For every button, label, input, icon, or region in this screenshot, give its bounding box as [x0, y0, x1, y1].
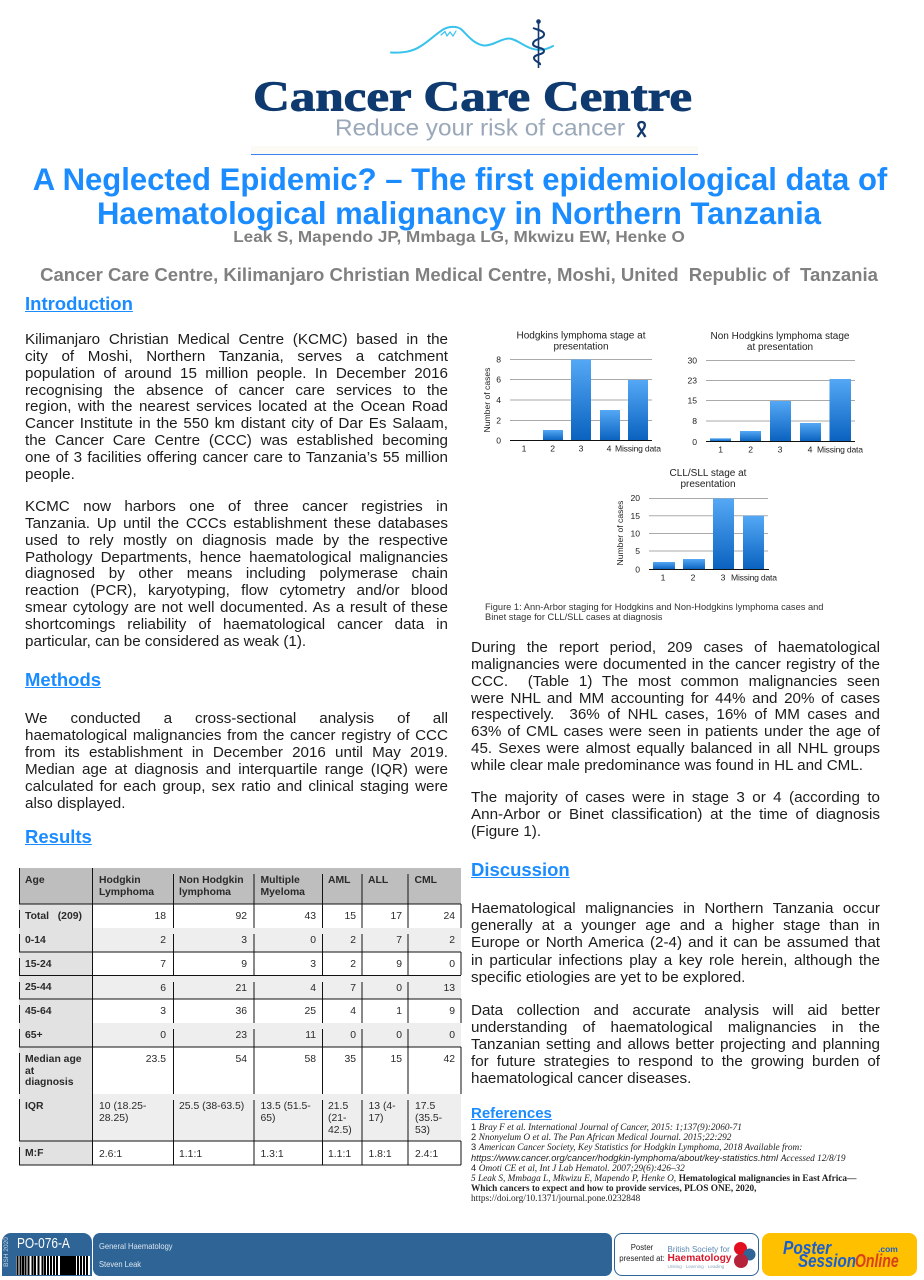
text block: methods: also displayed.	[25, 795, 125, 812]
chart: Non Hodgkins lymphoma stage: 8	[692, 416, 697, 426]
table row labels: IQR	[25, 1101, 44, 1112]
chart: CLL/SLL stage: presentation	[680, 479, 736, 490]
text block: introduction paragraph 1: the Cancer Care Centre (CCC) was established becoming	[25, 432, 448, 449]
text block: discussion paragraph 1: Europe or North America (2-4) and it can be assumed that	[471, 934, 880, 951]
table IQR and sex ratio values: 1.1:1	[179, 1149, 202, 1160]
footer: session bar	[93, 1233, 612, 1276]
chart: Hodgkins lymphoma stage: 0	[496, 436, 501, 446]
chart: Hodgkins lymphoma stage: 1	[522, 444, 527, 454]
icon: mountain wave	[391, 27, 553, 53]
table IQR and sex ratio values: 17.5	[415, 1101, 435, 1112]
text block: introduction paragraph 1: population of around 15 million people. In December 2016	[25, 365, 448, 382]
table header row: AML	[328, 875, 351, 886]
chart: Hodgkins lymphoma stage: 6	[496, 374, 501, 384]
chart: Non Hodgkins lymphoma stage: 4	[808, 444, 813, 454]
poster presented at: Poster	[631, 1243, 653, 1252]
table IQR and sex ratio values: 2.6:1	[99, 1149, 122, 1160]
chart: CLL/SLL stage	[615, 468, 777, 582]
table IQR and sex ratio values	[99, 1101, 442, 1160]
title: A Neglected Epidemic? – The first epidemiological data of	[33, 162, 887, 197]
table row labels: M:F	[25, 1148, 43, 1159]
text block: results paragraph 1: CCC. (Table 1) The most common malignancies seen	[471, 673, 880, 690]
chart: Hodgkins lymphoma stage	[482, 330, 661, 454]
figure caption: Figure 1: Ann-Arbor staging for Hodgkins and Non-Hodgkins lymphoma cases and	[485, 602, 823, 612]
table numeric values: 3	[310, 959, 316, 970]
title	[33, 162, 888, 230]
presenter: Steven Leak	[99, 1259, 141, 1269]
table IQR and sex ratio values: 13.5 (51.5-	[260, 1101, 311, 1112]
Haematology wordmark: Haematology	[668, 1252, 731, 1264]
text block: results paragraph 1: malignancies were documented in the cancer registry of the	[471, 656, 880, 673]
references list: 2 Nnonyelum O et al. The Pan African Medical Journal. 2015;22:292	[471, 1132, 731, 1143]
references list: https://www.cancer.org/cancer/hodgkin-lymphoma/about/key-statistics.html Accessed 12/8/19	[471, 1153, 846, 1164]
table IQR and sex ratio values: (21-	[328, 1113, 346, 1124]
icon: society circles	[734, 1242, 756, 1268]
table numeric values: 7	[396, 935, 402, 946]
text block: introduction paragraph 2: Tanzania. Up until the CCCs establishment these databases	[25, 515, 448, 532]
text block: results paragraph 2: Ann-Arbor or Binet classification) at the time of diagnosis	[471, 806, 880, 823]
chart: Hodgkins lymphoma stage: 2	[496, 416, 501, 426]
text block: discussion paragraph 2: haematological cancer diseases.	[471, 1070, 691, 1087]
figure caption	[485, 602, 823, 622]
text block: discussion paragraph 1: generally at a younger age and a higher stage than in	[471, 917, 880, 934]
table IQR and sex ratio values: 2.4:1	[415, 1149, 438, 1160]
table row labels: 25-44	[25, 982, 52, 993]
heading: References: References	[471, 1105, 552, 1122]
text block: methods: Median age at diagnosis and interquartile range (IQR) were	[25, 761, 448, 778]
table IQR and sex ratio values: 10 (18.25-	[99, 1101, 146, 1112]
text block: introduction paragraph 1: recognising the absence of cancer care services to the	[25, 382, 448, 399]
table numeric values: 0	[396, 1030, 402, 1041]
table row labels: 15-24	[25, 959, 52, 970]
chart: Hodgkins lymphoma stage: 3	[579, 444, 584, 454]
chart: Non Hodgkins lymphoma stage: 1	[718, 444, 723, 454]
table numeric values: 24	[443, 911, 455, 922]
title: Haematological malignancy in Northern Tanzania	[97, 196, 821, 230]
chart: Hodgkins lymphoma stage: Hodgkins lymphoma stage at	[517, 330, 646, 342]
text block: discussion paragraph 2: for future strategies to respond to the growing burden of	[471, 1053, 880, 1070]
text block: results paragraph 2: The majority of cases were in stage 3 or 4 (according to	[471, 789, 880, 806]
affiliation: Cancer Care Centre, Kilimanjaro Christian Medical Centre, Moshi, United Republic of Tanzania	[40, 264, 878, 285]
table row labels	[25, 911, 82, 1159]
table numeric values: 2	[160, 935, 166, 946]
table IQR and sex ratio values: 42.5)	[328, 1125, 352, 1136]
table header row: CML	[414, 875, 438, 886]
table numeric values: 3	[241, 935, 247, 946]
references list	[471, 1122, 856, 1204]
table numeric values: 9	[241, 959, 247, 970]
figure caption: Binet stage for CLL/SLL cases at diagnosis	[485, 612, 662, 622]
table numeric values: 43	[304, 911, 316, 922]
text block: introduction paragraph 1: people.	[25, 466, 75, 483]
table numeric values: 2	[449, 935, 455, 946]
text block: methods	[25, 710, 448, 812]
wordmark: Online: Online	[855, 1251, 899, 1271]
text block: introduction paragraph 1	[25, 331, 448, 483]
heading: Results: Results	[25, 826, 92, 847]
text block: discussion paragraph 2	[471, 1002, 880, 1087]
chart: CLL/SLL stage: 1	[661, 572, 666, 582]
text block: introduction paragraph 2: particular, can be considered as weak (1).	[25, 633, 306, 650]
poster presented at	[619, 1243, 665, 1262]
table numeric values: 42	[443, 1054, 455, 1065]
table row labels: diagnosis	[25, 1077, 74, 1088]
chart: CLL/SLL stage: Number of cases	[615, 501, 625, 565]
table numeric values: 0	[449, 959, 455, 970]
table IQR and sex ratio values: 25.5 (38-63.5)	[179, 1101, 244, 1112]
table numeric values: 7	[350, 983, 356, 994]
chart: Hodgkins lymphoma stage: 8	[496, 354, 501, 364]
table row labels: 0-14	[25, 935, 46, 946]
text block: methods: calculated for each group, sex ratio and clinical staging were	[25, 778, 448, 795]
society year: BSH 2020	[3, 1237, 10, 1267]
table numeric values: 0	[160, 1030, 166, 1041]
table header row: ALL	[368, 875, 389, 886]
table numeric values: 17	[390, 911, 402, 922]
chart: CLL/SLL stage: CLL/SLL stage at	[670, 468, 747, 479]
table numeric values: 2	[350, 935, 356, 946]
text block: discussion paragraph 1: Haematological malignancies in Northern Tanzania occur	[471, 900, 880, 917]
text block: introduction paragraph 1: Kilimanjaro Christian Medical Centre (KCMC) based in the	[25, 331, 448, 348]
references list: https://doi.org/10.1371/journal.pone.0232848	[471, 1194, 640, 1204]
chart: Hodgkins lymphoma stage: Missing data	[615, 444, 661, 454]
icon: ribbon	[638, 122, 646, 137]
table numeric values: 4	[350, 1006, 356, 1017]
table header row	[25, 875, 438, 898]
table numeric values: 0	[396, 983, 402, 994]
table header row: Multiple	[260, 875, 300, 886]
wordmark: Poster: Poster	[783, 1238, 831, 1258]
table numeric values: 15	[344, 911, 356, 922]
table header row: Myeloma	[260, 887, 305, 898]
table numeric values: 11	[305, 1030, 316, 1041]
table IQR and sex ratio values: 17)	[368, 1113, 384, 1124]
table IQR and sex ratio values: 28.25)	[99, 1113, 128, 1124]
text block: methods: We conducted a cross-sectional analysis of all	[25, 710, 448, 727]
footer: British Society for Haematology badge	[614, 1233, 759, 1276]
chart: CLL/SLL stage: 3	[721, 572, 726, 582]
text block: results paragraph 1: 45. Sexes were almost equally balanced in all NHL groups	[471, 740, 880, 757]
wordmark: .com: .com	[878, 1244, 898, 1254]
authors: Leak S, Mapendo JP, Mmbaga LG, Mkwizu EW, Henke O	[233, 229, 685, 246]
wordmark: Session: Session	[798, 1251, 856, 1271]
text block: results paragraph 1: 63% of CML cases were seen in patients under the age of	[471, 723, 880, 740]
text block: introduction paragraph 2: reaction (PCR), karyotyping, flow cytometry and/or blood	[25, 582, 448, 599]
text block: discussion paragraph 2: Tanzanian setting and allows better projecting and planning	[471, 1036, 880, 1053]
table numeric values: 1	[396, 1006, 402, 1017]
table numeric values: 58	[304, 1054, 316, 1065]
society name: British Society for	[668, 1245, 730, 1254]
text block: results paragraph 1: respectively. 36% of NHL cases, 16% of MM cases and	[471, 706, 880, 723]
chart: Hodgkins lymphoma stage: 2	[550, 444, 555, 454]
text block: results paragraph 1: were NHL and MM accounting for 44% and 20% of cases	[471, 690, 880, 707]
references list: 4 Omoti CE et al, Int J Lab Hematol. 2007;29(6):426–32	[471, 1163, 685, 1174]
table IQR and sex ratio values: 1.3:1	[260, 1149, 284, 1160]
table numeric values: 4	[310, 983, 316, 994]
chart: Non Hodgkins lymphoma stage: 15	[687, 396, 697, 406]
chart: CLL/SLL stage: 10	[630, 528, 640, 538]
text block: methods: haematological malignancies from the cancer registry of CCC	[25, 727, 448, 744]
table numeric values: 3	[160, 1006, 166, 1017]
table row labels: at	[25, 1066, 35, 1077]
text block: discussion paragraph 1	[471, 900, 880, 986]
table row labels: 65+	[25, 1030, 43, 1041]
chart: Non Hodgkins lymphoma stage: Missing data	[817, 444, 863, 454]
table numeric values: 25	[304, 1006, 316, 1017]
table numeric values: 2	[350, 959, 356, 970]
references list: 1 Bray F et al. International Journal of Cancer, 2015: 1;137(9):2060-71	[471, 1122, 742, 1133]
text block: introduction paragraph 2: KCMC now harbors one of three cancer registries in	[25, 498, 448, 515]
icon: rod of asclepius	[533, 19, 544, 68]
chart: Non Hodgkins lymphoma stage	[687, 331, 863, 454]
chart: Non Hodgkins lymphoma stage: Non Hodgkins lymphoma stage	[711, 331, 850, 342]
chart: Hodgkins lymphoma stage: 4	[496, 395, 501, 405]
barcode	[16, 1256, 90, 1275]
logo wordmark: Cancer Care Centre	[253, 74, 692, 120]
table IQR and sex ratio values: 65)	[260, 1113, 276, 1124]
chart: CLL/SLL stage: 5	[635, 546, 640, 556]
table numeric values: 9	[449, 1006, 455, 1017]
table numeric values	[146, 911, 455, 1065]
chart: Hodgkins lymphoma stage: 4	[607, 444, 612, 454]
table numeric values: 9	[396, 959, 402, 970]
chart: Non Hodgkins lymphoma stage: 0	[692, 437, 697, 447]
table row labels: 45-64	[25, 1006, 52, 1017]
text block: introduction paragraph 1: Cancer Institute in the 550 km distant city of Dar Es Salaam,	[25, 415, 448, 432]
chart: CLL/SLL stage: Missing data	[731, 572, 777, 582]
references list: Which cancers to expect and how to provide services, PLOS ONE, 2020,	[471, 1184, 756, 1194]
heading: Methods: Methods	[25, 669, 101, 690]
table numeric values: 15	[390, 1054, 402, 1065]
chart: Hodgkins lymphoma stage: Number of cases	[482, 368, 492, 432]
table numeric values: 21	[235, 983, 247, 994]
text block: methods: from its establishment in December 2016 until May 2019.	[25, 744, 448, 761]
text block: discussion paragraph 2: Data collection and accurate analysis will aid better	[471, 1002, 880, 1019]
logo tagline: Reduce your risk of cancer	[335, 114, 625, 140]
table header row: Hodgkin	[99, 875, 141, 886]
table numeric values: 35	[344, 1054, 356, 1065]
text block: introduction paragraph 2: smear cytology are not well documented. As a result of these	[25, 599, 448, 616]
table IQR and sex ratio values: 53)	[415, 1125, 430, 1136]
references list: 5 Leak S, Mmbaga L, Mkwizu E, Mapendo P, Henke O, Hematological malignancies in East Africa—	[471, 1174, 856, 1184]
table row labels: Median age	[25, 1054, 82, 1065]
society strapline: Uniting · Learning · Leading	[668, 1264, 724, 1269]
chart: Non Hodgkins lymphoma stage: at presentation	[747, 342, 813, 353]
table IQR and sex ratio values: 1.1:1	[328, 1149, 351, 1160]
text block: introduction paragraph 1: one of 3 facilities offering cancer care to Tanzania’s 55 million	[25, 449, 448, 466]
logo: Cancer Care Centre	[251, 19, 698, 155]
table IQR and sex ratio values: (35.5-	[415, 1113, 442, 1124]
text block: results paragraph 1: During the report period, 209 cases of haematological	[471, 639, 880, 656]
footer: poster id tab	[2, 1233, 92, 1276]
table numeric values: 54	[235, 1054, 247, 1065]
session topic: General Haematology	[99, 1241, 173, 1251]
table header row: Lymphoma	[99, 887, 154, 898]
table IQR and sex ratio values: 1.8:1	[368, 1149, 392, 1160]
chart: CLL/SLL stage: 20	[630, 493, 640, 503]
table numeric values: 36	[235, 1006, 247, 1017]
table row labels: Total (209)	[25, 911, 82, 922]
table numeric values: 92	[235, 911, 247, 922]
text block: results paragraph 1	[471, 639, 880, 774]
heading: Introduction: Introduction	[25, 293, 133, 314]
text block: introduction paragraph 2: Pathology Departments, hence haematological malignancies	[25, 549, 448, 566]
chart: Non Hodgkins lymphoma stage: 30	[687, 356, 697, 366]
table header row: lymphoma	[179, 887, 231, 898]
table IQR and sex ratio values: 21.5	[328, 1101, 348, 1112]
text block: introduction paragraph 2: diagnosed by other means including polymerase chain	[25, 565, 448, 582]
text block: results paragraph 2: (Figure 1).	[471, 823, 541, 840]
table numeric values: 23.5	[146, 1054, 166, 1065]
text block: results paragraph 1: while clear male predominance was found in HL and CML.	[471, 757, 863, 774]
table numeric values: 18	[154, 911, 166, 922]
text block: introduction paragraph 1: region, with the nearest services located at the Ocean Road	[25, 398, 448, 415]
references list: 3 American Cancer Society, Key Statistics for Hodgkin Lymphoma, 2018 Available from:	[471, 1142, 802, 1153]
text block: discussion paragraph 1: in particular infections play a key role herein, although the	[471, 952, 880, 969]
table numeric values: 0	[449, 1030, 455, 1041]
chart: CLL/SLL stage: 2	[691, 572, 696, 582]
chart: Non Hodgkins lymphoma stage: 23	[687, 376, 697, 386]
table numeric values: 0	[310, 935, 316, 946]
text block: introduction paragraph 1: city of Moshi, Northern Tanzania, serves a catchment	[25, 348, 448, 365]
table numeric values: 7	[160, 959, 166, 970]
footer: Poster Session Online badge	[762, 1233, 917, 1276]
text block: introduction paragraph 2: used to rely mostly on diagnosis made by the respective	[25, 532, 448, 549]
poster number: PO-076-A	[17, 1236, 70, 1252]
table header row: Age	[25, 875, 45, 886]
poster presented at: presented at:	[619, 1254, 665, 1262]
table IQR and sex ratio values: 13 (4-	[368, 1101, 396, 1112]
chart: Non Hodgkins lymphoma stage: 3	[778, 444, 783, 454]
chart: Non Hodgkins lymphoma stage: 2	[748, 444, 753, 454]
text block: discussion paragraph 1: specific etiologies are yet to be explored.	[471, 969, 745, 986]
table numeric values: 0	[350, 1030, 356, 1041]
heading: Discussion: Discussion	[471, 859, 570, 880]
chart: CLL/SLL stage: 0	[635, 564, 640, 574]
table header row: Non Hodgkin	[179, 875, 244, 886]
table numeric values: 23	[235, 1030, 247, 1041]
text block: discussion paragraph 2: understanding of haematological malignancies in the	[471, 1019, 880, 1036]
table numeric values: 13	[443, 983, 455, 994]
table numeric values: 6	[160, 983, 166, 994]
text block: results paragraph 2	[471, 789, 880, 840]
chart: CLL/SLL stage: 15	[630, 511, 640, 521]
text block: introduction paragraph 2: shortcomings reliability of haematological cancer data in	[25, 616, 448, 633]
text block: introduction paragraph 2	[25, 498, 448, 650]
chart: Hodgkins lymphoma stage: presentation	[553, 342, 609, 352]
